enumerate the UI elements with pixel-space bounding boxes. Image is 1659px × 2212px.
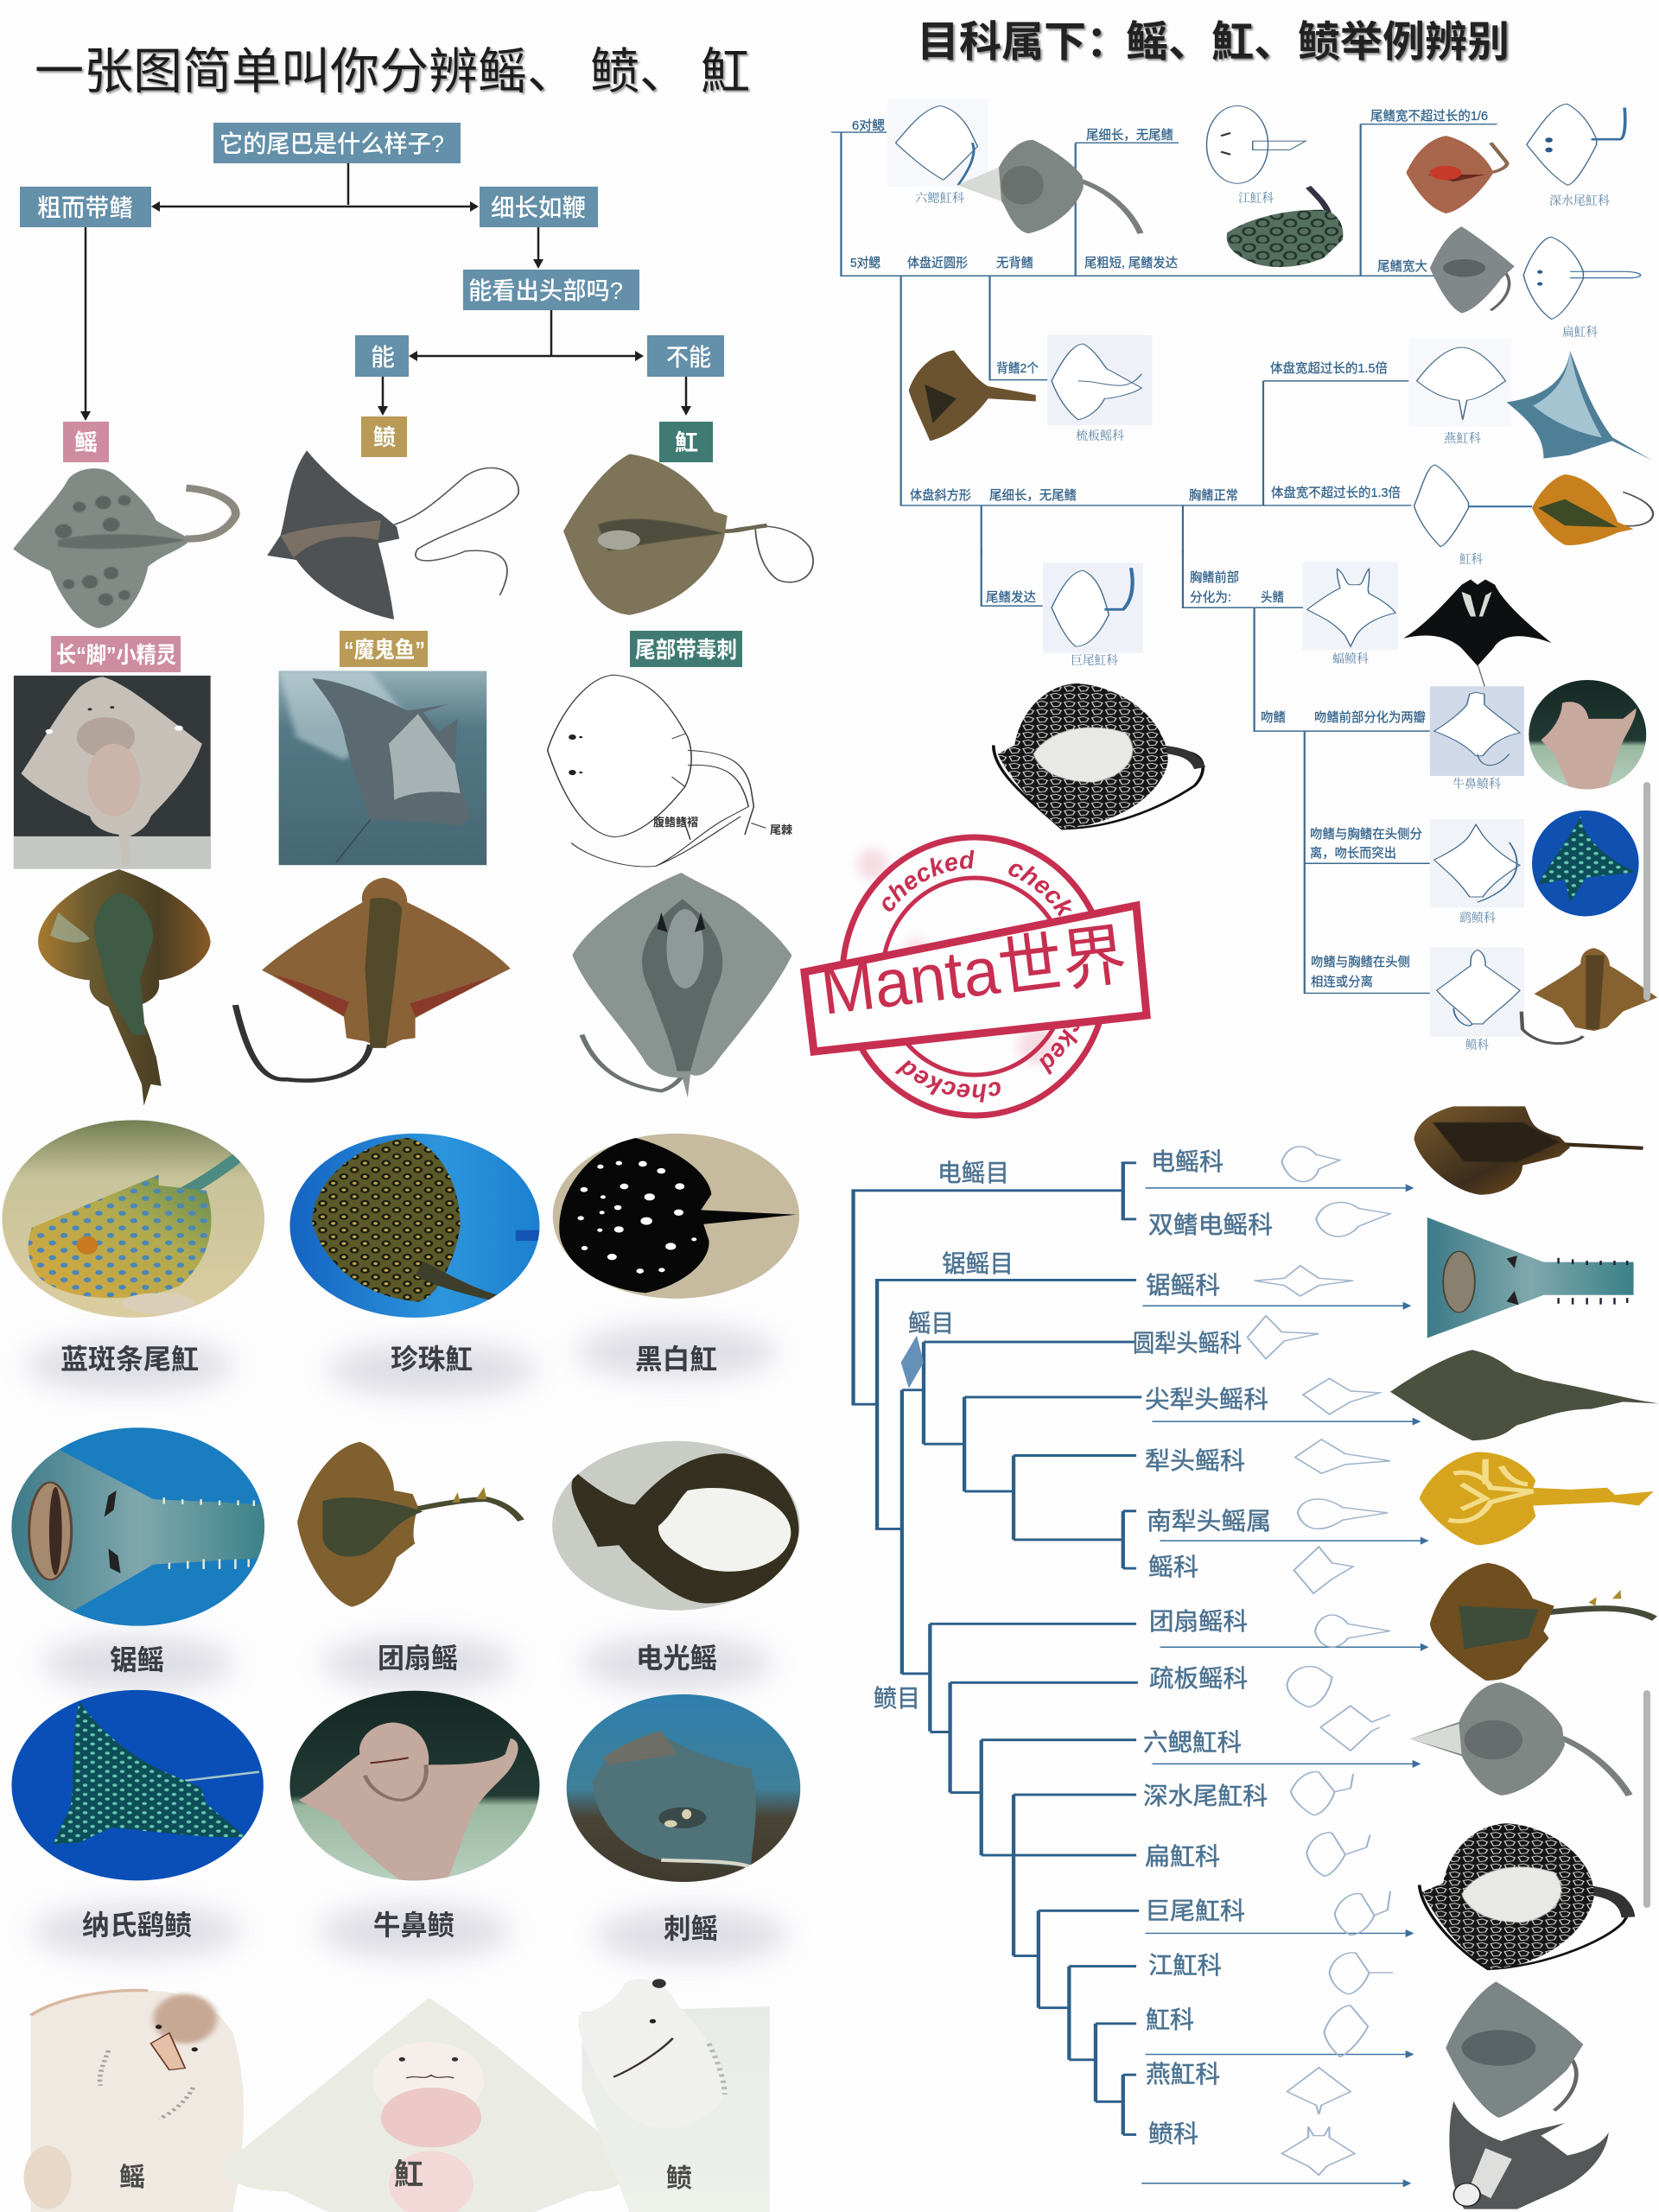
face: skate [24, 1990, 244, 2212]
name: row 1: 蓝斑条尾魟 [60, 1344, 199, 1375]
tree lines lower [902, 1674, 1139, 2134]
name: row 3: 刺鳐 [664, 1913, 718, 1944]
name: row 2 [110, 1643, 717, 1675]
inset: giant-tail stingray drawing [1043, 563, 1143, 653]
face captions [119, 2158, 692, 2193]
tag: skate [63, 422, 109, 462]
tag: stingray: 魟 [675, 429, 698, 455]
photo: black and white ray [550, 1131, 804, 1300]
drawings and photos [14, 671, 791, 1106]
name: row 2: 锯鳐 [110, 1644, 164, 1675]
anatomy drawing labels: 尾棘 [770, 823, 792, 836]
key labels: traits: 尾鳍宽不超过长的1/6 [1370, 109, 1488, 124]
key labels: traits: 体盘近圆形 [907, 255, 968, 270]
key labels: traits: 吻鳍 [1261, 710, 1286, 725]
fish: sixgill stingray [958, 140, 1141, 233]
inset: devil ray drawing [1303, 562, 1398, 650]
small family sketches upper [1248, 1147, 1390, 1647]
photo: electric ray underside [550, 1440, 804, 1612]
order labels: 鳐目 [908, 1310, 954, 1337]
key labels: traits: 无背鳍 [996, 256, 1033, 270]
tag: venomous tail spine [630, 631, 742, 667]
name: row 2: 电光鳐 [636, 1643, 717, 1674]
fish: guitarfish grey-green [1390, 1350, 1659, 1440]
fish: brown eagle ray [235, 878, 511, 1081]
key labels: traits: 离，吻长而突出 [1310, 846, 1396, 861]
fish: grey stingray large [1446, 1981, 1583, 2118]
fish: stingray with whip tail [563, 454, 813, 615]
key labels: traits: 胸鳍正常 [1189, 488, 1238, 503]
fish: blue eagle ray [1507, 351, 1652, 461]
anatomy drawing labels: 腹鳍鳍褶 [653, 816, 698, 829]
name: row 2: 团扇鳐 [378, 1643, 458, 1674]
question box: head: 能看出头部吗? [468, 277, 623, 304]
inset: river stingray drawing [1206, 105, 1306, 183]
family labels [1133, 1148, 1273, 2147]
tag: devil fish [340, 631, 428, 667]
fish: yellow banded ray [1420, 1452, 1654, 1545]
family labels: 电鳐科 [1151, 1148, 1224, 1175]
photo: manta from below [279, 671, 486, 865]
family labels: 深水尾魟科 [1143, 1783, 1268, 1809]
family labels: 团扇鳐科 [1149, 1608, 1248, 1635]
key labels: traits [850, 109, 1488, 989]
stamp: Manta world [800, 835, 1151, 1118]
order labels: 电鳐目 [938, 1160, 1009, 1186]
name: row 1: 黑白魟 [635, 1344, 717, 1375]
panel: species photo gallery [0, 1116, 804, 1961]
photo: cownose ray small circle [1528, 678, 1649, 791]
inset: round stingray drawing [1523, 237, 1641, 319]
key labels: family captions: 燕魟科 [1444, 431, 1481, 446]
family labels: 疏板鳐科 [1149, 1665, 1248, 1692]
tag: skate: 鳐 [74, 429, 98, 455]
key labels: traits: 相连或分离 [1311, 975, 1373, 989]
tag: long-legged sprite [51, 636, 181, 672]
key labels: family captions: 深水尾魟科 [1549, 194, 1610, 208]
box: whip [480, 187, 598, 227]
family labels: 双鳍电鳐科 [1148, 1211, 1273, 1238]
panel: three top specimens [13, 450, 813, 628]
name: row 1 [60, 1344, 717, 1375]
box: yes: 能 [371, 344, 395, 371]
inset: two-dorsal drawing [1047, 335, 1152, 425]
key labels: traits: 分化为: [1190, 590, 1231, 605]
line drawing: stingray anatomy [548, 675, 766, 867]
key labels: family captions: 梳板鳐科 [1076, 429, 1124, 443]
key labels: traits: 体盘斜方形 [910, 487, 971, 503]
fish: red-brown deepwater stingray [1406, 136, 1507, 213]
question box: head [463, 270, 639, 310]
key labels: family captions: 鲼科 [1465, 1038, 1489, 1052]
key labels: traits: 头鳍 [1261, 590, 1284, 605]
photo: spotted eagle ray [8, 1688, 267, 1883]
key labels: family captions: 巨尾魟科 [1071, 653, 1118, 668]
key labels: family captions: 牛鼻鲼科 [1452, 777, 1501, 791]
photo: guitarfish underside [14, 676, 211, 868]
key labels: family captions [915, 191, 1610, 1052]
name: row 3 [82, 1910, 718, 1944]
key labels: traits: 胸鳍前部 [1190, 570, 1239, 585]
tag: devil fish: “魔鬼鱼” [344, 637, 425, 663]
key labels: traits: 尾鳍发达 [986, 590, 1036, 605]
family labels: 南犁头鳐属 [1147, 1508, 1271, 1535]
fish: electric ray [1414, 1106, 1643, 1195]
panel: three-column species traits [14, 631, 792, 1106]
key labels: family captions: 鹞鲼科 [1459, 911, 1496, 925]
tree lines upper [854, 1163, 1141, 1732]
fish: mottled giant stingray [994, 683, 1203, 829]
fish: thornback fan ray [297, 1442, 521, 1607]
fish: mottled stingray large [1420, 1823, 1629, 1969]
fish: river stingray spotted [1227, 187, 1343, 267]
box: whip: 细长如鞭 [491, 194, 586, 221]
tag: stingray [659, 422, 713, 462]
family labels: 犁头鳐科 [1145, 1447, 1245, 1474]
key labels: traits: 吻鳍与胸鳍在头侧分 [1310, 827, 1422, 842]
fish: grey ribbed stingray [572, 873, 791, 1097]
key labels: traits: 尾细长，无尾鳍 [1086, 128, 1173, 143]
key labels: traits: 6对鳃 [852, 118, 885, 133]
key labels: family captions: 六鳃魟科 [915, 191, 964, 206]
family labels: 鳐科 [1148, 1554, 1198, 1580]
box: thick with fin: 粗而带鳍 [37, 194, 133, 221]
photo: blue-spotted ribbontail ray [0, 1116, 270, 1321]
title: left: 一张图简单叫你分辨鳐、鲼、魟 [35, 44, 750, 99]
inset: stingray family drawing [1414, 465, 1532, 547]
name: row 3: 纳氏鹞鲼 [82, 1910, 192, 1941]
family labels: 江魟科 [1148, 1952, 1222, 1979]
face: eagle ray [578, 1979, 770, 2212]
face captions: 鳐 [119, 2164, 145, 2192]
tag: venomous tail spine: 尾部带毒刺 [635, 637, 737, 663]
tag: eagle ray: 鲼 [373, 424, 396, 450]
flowchart connector lines [80, 163, 691, 421]
stamp: Manta world: checked [882, 850, 975, 912]
key tree lines lower [982, 550, 1430, 993]
family labels: 燕魟科 [1146, 2061, 1220, 2088]
fish: skate [13, 468, 236, 628]
fish: fan ray dark [1430, 1563, 1655, 1681]
key labels: traits: 尾粗短, 尾鳍发达 [1084, 256, 1178, 270]
pointer arrow: Rajiformes [901, 1336, 924, 1389]
label shadows [26, 1326, 786, 1961]
fish: guitar-shaped ray [38, 869, 211, 1106]
photo: sawfish underside [8, 1425, 270, 1628]
panel: three pale faces [24, 1979, 770, 2212]
box: no [647, 335, 724, 377]
family labels: 鲼科 [1148, 2120, 1198, 2147]
key labels: family captions: 蝠鲼科 [1332, 652, 1369, 666]
arrows upper [1142, 1184, 1429, 1651]
photo: roughtail stingray [563, 1693, 804, 1885]
key labels: family captions: 魟科 [1459, 552, 1483, 567]
key labels: traits: 背鳍2个 [996, 361, 1039, 376]
family labels: 魟科 [1146, 2006, 1194, 2033]
box: thick with fin [20, 187, 151, 227]
scrollbars [1643, 782, 1650, 1908]
name: row 1: 珍珠魟 [391, 1344, 473, 1375]
fish: sixgill stingray large [1410, 1682, 1630, 1796]
box: no: 不能 [666, 344, 711, 371]
stamp: Manta world: Manta世界 [817, 916, 1130, 1029]
photo: spotted eagle ray small circle [1532, 810, 1639, 916]
small family sketches lower [1281, 1667, 1393, 2175]
fish: manta sketch [1449, 2101, 1609, 2209]
key labels: traits: 5对鳃 [850, 256, 880, 270]
key labels: family captions: 扁魟科 [1562, 325, 1598, 340]
inset: sixgill drawing [887, 99, 988, 187]
stamp: Manta world: check [1008, 864, 1071, 917]
key labels: traits: 尾细长，无尾鳍 [989, 488, 1077, 503]
photo: cownose ray [286, 1689, 545, 1883]
panel: phylogenetic tree [854, 1106, 1659, 2209]
key labels: traits: 尾鳍宽大 [1377, 259, 1427, 274]
tag: eagle ray [361, 416, 407, 457]
order labels [874, 1160, 1014, 1712]
inset: eagle ray family drawing [1408, 339, 1512, 427]
face captions: 魟 [394, 2158, 423, 2191]
inset: eagle rays drawing [1430, 947, 1524, 1037]
question box: tail [213, 123, 461, 163]
fish: black manta [1403, 580, 1552, 689]
face captions: 鲼 [666, 2164, 692, 2193]
family labels: 尖犁头鳐科 [1145, 1386, 1268, 1413]
family labels: 扁魟科 [1145, 1843, 1220, 1870]
stamp: Manta world: cked [1039, 1027, 1080, 1075]
order labels: 锯鳐目 [942, 1250, 1014, 1277]
fish: brown eagle ray small [1522, 948, 1657, 1044]
fish: brown guitarfish-like [909, 350, 1036, 441]
panel: key to families [831, 99, 1657, 1052]
name: row 3: 牛鼻鲼 [373, 1910, 454, 1941]
box: yes [355, 335, 409, 377]
key labels: traits: 体盘宽不超过长的1.3倍 [1271, 485, 1401, 500]
inset: deepwater stingray drawing [1527, 104, 1625, 185]
arrows lower [1141, 1760, 1421, 2187]
question box: tail: 它的尾巴是什么样子? [219, 130, 444, 157]
key labels: traits: 吻鳍前部分化为两瓣 [1314, 710, 1426, 725]
key tree lines upper [831, 124, 1497, 553]
anatomy drawing labels [653, 816, 792, 836]
tag: long-legged sprite: 长“脚”小精灵 [56, 642, 176, 668]
fish: eagle ray with whip tail [267, 450, 518, 620]
family labels: 六鳃魟科 [1143, 1729, 1242, 1756]
key labels: family captions: 江魟科 [1238, 191, 1274, 206]
inset: eagle ray drawing [1430, 819, 1524, 907]
photo: honeycomb pearl ray [286, 1131, 545, 1321]
order labels: 鲼目 [874, 1685, 920, 1712]
stamp: Manta world: checked [895, 1059, 1001, 1103]
title: right: 目科属下：鳐、魟、鲼举例辨别 [917, 19, 1510, 66]
inset: cownose ray drawing [1430, 686, 1524, 776]
fish: grey round stingray [1430, 226, 1515, 313]
key labels: traits: 吻鳍与胸鳍在头侧 [1311, 955, 1410, 969]
family labels: 巨尾魟科 [1145, 1897, 1245, 1924]
family labels: 锯鳐科 [1146, 1272, 1220, 1299]
family labels: 圆犁头鳐科 [1133, 1330, 1242, 1357]
key labels: traits: 体盘宽超过长的1.5倍 [1270, 360, 1388, 376]
panel: tail flowchart [20, 123, 724, 462]
face: stingray [222, 1998, 632, 2212]
fish: orange stingray [1532, 474, 1653, 545]
fish: sawfish [1427, 1217, 1634, 1338]
